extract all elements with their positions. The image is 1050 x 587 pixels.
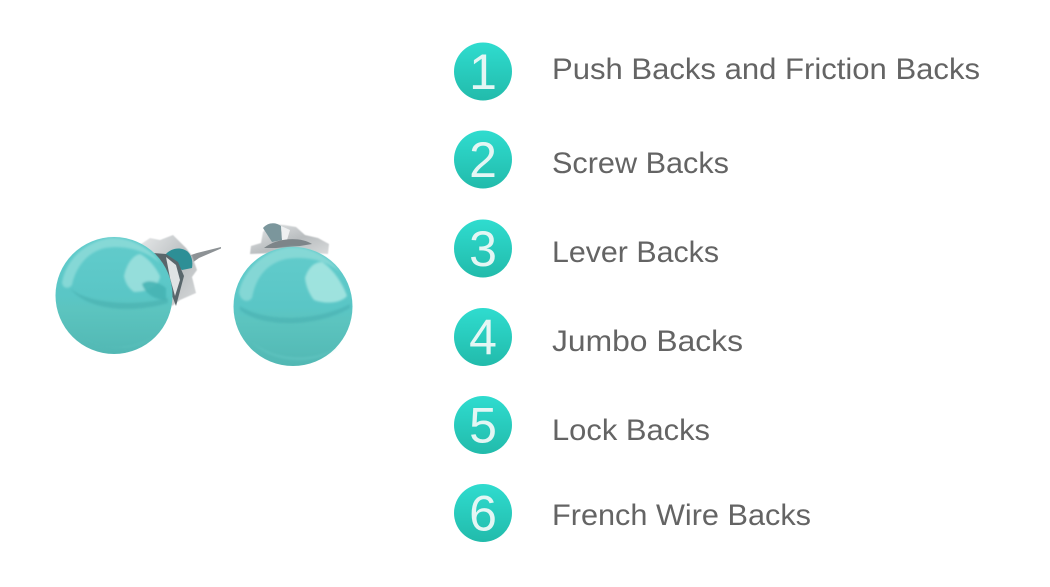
left earring teal setting xyxy=(165,249,192,270)
list item 3 xyxy=(454,220,719,278)
badge 1 xyxy=(454,42,512,100)
badge 5: 5 xyxy=(469,398,497,454)
list item 2 xyxy=(454,130,729,188)
left earring silver back xyxy=(141,235,197,306)
label 5: Lock Backs xyxy=(552,414,710,447)
badge 1: 1 xyxy=(469,44,497,100)
badge 4: 4 xyxy=(469,310,497,366)
right earring silver back xyxy=(250,224,329,254)
left pearl highlights xyxy=(62,238,168,348)
right pearl highlights xyxy=(239,247,350,360)
label 1: Push Backs and Friction Backs xyxy=(552,53,980,86)
label 6: French Wire Backs xyxy=(552,499,811,532)
right earring setting xyxy=(263,223,282,242)
list item 1 xyxy=(454,42,980,100)
list item 4 xyxy=(454,308,743,366)
badge 3: 3 xyxy=(469,221,497,277)
badge 5 xyxy=(454,396,512,454)
badge 6 xyxy=(454,484,512,542)
label 4: Jumbo Backs xyxy=(552,325,743,358)
badge 4 xyxy=(454,308,512,366)
left earring metal neck xyxy=(153,253,184,306)
left earring post xyxy=(188,247,221,263)
list item 6 xyxy=(454,484,811,542)
right pearl xyxy=(234,247,352,366)
list item 5 xyxy=(454,396,710,454)
label 3: Lever Backs xyxy=(552,236,719,269)
right stud earring xyxy=(234,223,352,366)
badge 3 xyxy=(454,220,512,278)
badge 2 xyxy=(454,130,512,188)
left pearl xyxy=(56,237,172,354)
badge 6: 6 xyxy=(469,486,497,542)
label 2: Screw Backs xyxy=(552,147,729,180)
left stud earring xyxy=(56,235,221,354)
badge 2: 2 xyxy=(469,132,497,188)
